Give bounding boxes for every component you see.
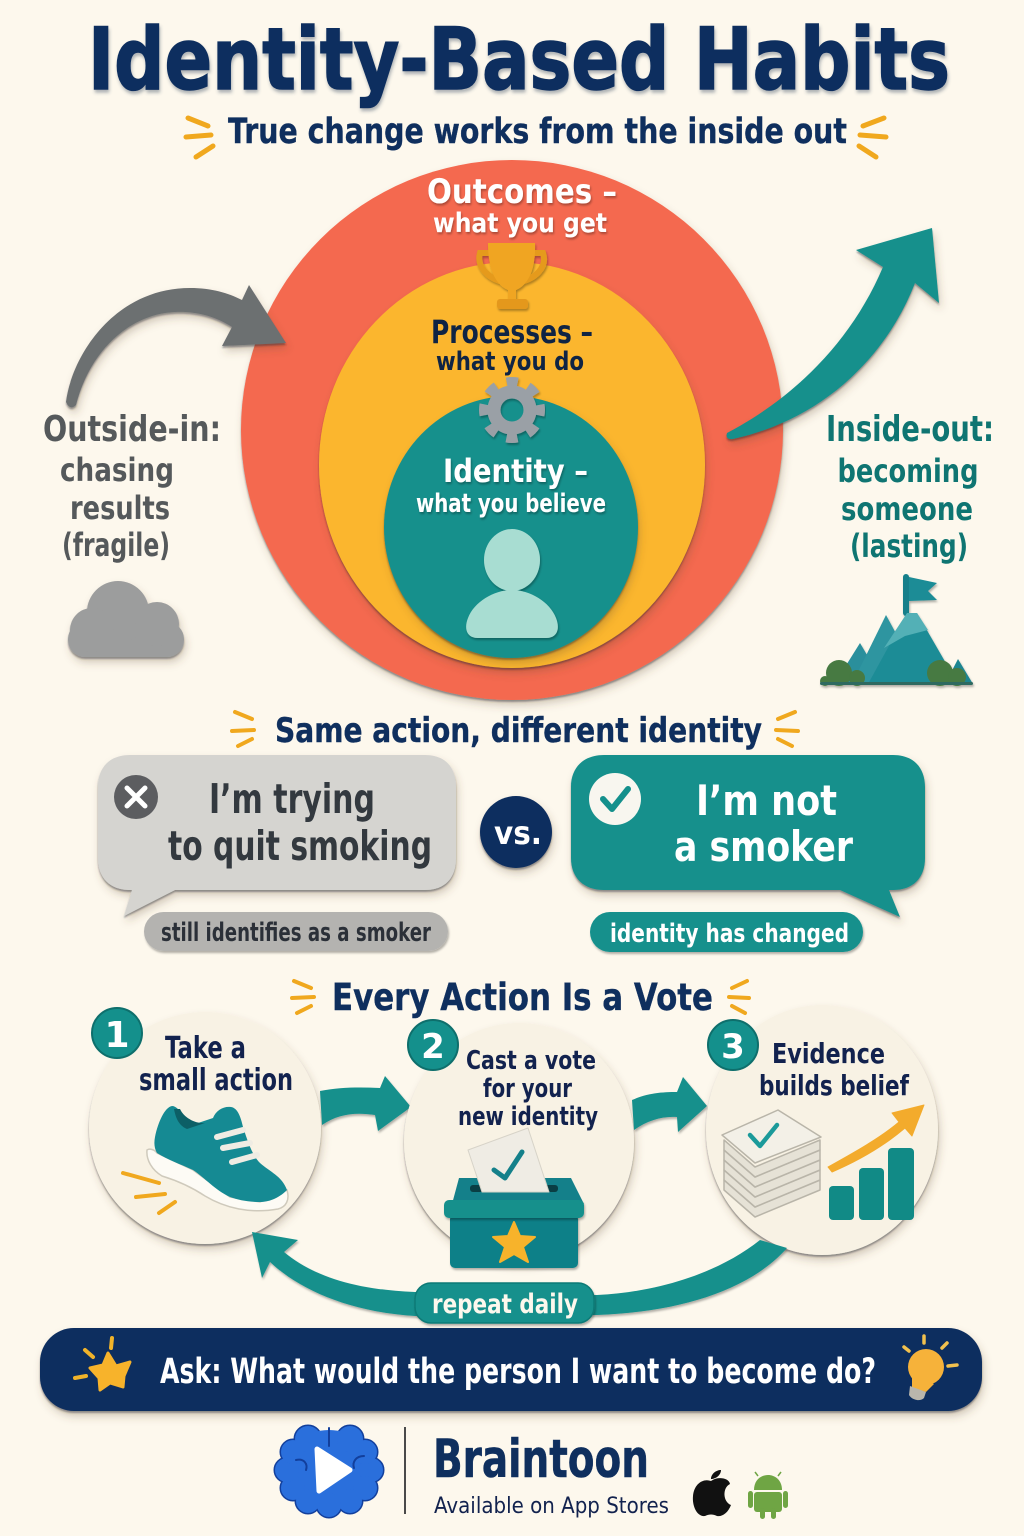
- processes label: [431, 313, 593, 377]
- icon: shoe: [123, 1106, 288, 1213]
- step circle: [404, 1023, 634, 1261]
- outside-in label: Outside-in:: [43, 409, 221, 450]
- speech bubble: not a smoker: [571, 755, 925, 917]
- outside-in label: (fragile): [62, 526, 170, 564]
- speech bubble: trying to quit: [98, 755, 456, 916]
- icon: person: [466, 529, 558, 638]
- arrow: step 2 to 3: [632, 1077, 707, 1132]
- icon: brain with play: [275, 1426, 383, 1517]
- logo divider: [404, 1427, 406, 1514]
- left sparks: [292, 981, 314, 1013]
- outside-in label: [43, 409, 221, 564]
- left sparks: [232, 712, 254, 746]
- bubble shape: [98, 755, 456, 916]
- repeat daily pill: repeat daily: [432, 1289, 578, 1320]
- outside-in label: chasing: [60, 451, 174, 489]
- step text: new identity: [458, 1102, 598, 1132]
- inside-out label: someone: [841, 490, 973, 528]
- step text: for your: [483, 1074, 572, 1104]
- number badge: [408, 1020, 458, 1070]
- loop arrow: repeat daily: [252, 1232, 787, 1316]
- subtitle left sparks: [186, 118, 213, 157]
- icon: check mark: [589, 773, 641, 825]
- heading text: Same action, different identity: [275, 711, 762, 751]
- subtitle text: True change works from the inside out: [228, 112, 847, 152]
- bubble shape: [571, 755, 925, 917]
- inside-out label: becoming: [838, 452, 978, 490]
- step 3: 3: [721, 1027, 745, 1067]
- bubble text: a smoker: [674, 822, 853, 871]
- step text: Evidence: [772, 1037, 885, 1070]
- icon: ballot box: [444, 1128, 584, 1268]
- outcomes label: [427, 172, 617, 239]
- identity label: what you believe: [416, 489, 606, 519]
- bubble text: to quit smoking: [168, 822, 432, 870]
- tagline: Available on App Stores: [434, 1494, 669, 1519]
- inside-out label: (lasting): [850, 527, 968, 565]
- number badge: [92, 1008, 142, 1058]
- identity circle: [384, 396, 638, 658]
- icon: android: [748, 1472, 788, 1519]
- outcomes label: what you get: [433, 208, 607, 239]
- step 2: 2: [421, 1027, 445, 1067]
- outcomes label: Outcomes –: [427, 172, 617, 212]
- processes circle: [319, 262, 705, 668]
- icon: x mark: [114, 775, 158, 819]
- section heading: every action: [292, 976, 749, 1019]
- caption pill: still identifies: still identifies as a smoker: [161, 918, 431, 948]
- step text: builds belief: [759, 1069, 910, 1102]
- question banner: [40, 1328, 982, 1411]
- inside-out label: [826, 409, 994, 565]
- number badge: [708, 1020, 758, 1070]
- bubble text: I’m trying: [209, 775, 375, 823]
- vs badge: [480, 796, 552, 868]
- step 1: [89, 1008, 321, 1244]
- processes label: what you do: [436, 347, 584, 377]
- outside-in arrow: [66, 285, 286, 407]
- processes label: Processes –: [431, 313, 593, 351]
- subtitle: [186, 112, 886, 157]
- vs badge: vs.: [494, 814, 542, 852]
- subtitle right sparks: [859, 118, 886, 157]
- caption pill: identity changed: identity has changed: [610, 919, 849, 949]
- step text: [458, 1046, 598, 1132]
- heading text: Every Action Is a Vote: [332, 976, 713, 1019]
- icon: gear: [484, 382, 540, 438]
- step text: [139, 1031, 293, 1098]
- icon: trophy: [479, 243, 544, 309]
- bubble text: I’m not: [696, 776, 837, 825]
- icon: cloud: [68, 581, 184, 657]
- step text: Cast a vote: [466, 1046, 596, 1076]
- step text: Take a: [165, 1031, 246, 1066]
- caption pill: still identifies: [144, 912, 448, 951]
- outcomes circle: [241, 160, 783, 700]
- icon: star: [75, 1338, 130, 1390]
- repeat daily pill: [415, 1283, 594, 1323]
- caption pill: identity changed: [590, 912, 863, 952]
- right sparks: [776, 712, 798, 746]
- section heading: same action: [232, 711, 798, 751]
- step 2: [404, 1020, 634, 1268]
- identity label: Identity –: [443, 452, 588, 490]
- bubble text: [674, 776, 853, 871]
- right sparks: [729, 981, 749, 1013]
- step text: [759, 1037, 910, 1102]
- icon: mountain with flag: [820, 574, 973, 686]
- step circle: [89, 1012, 321, 1244]
- inside-out arrow: [727, 228, 939, 439]
- brand name: Braintoon: [433, 1429, 649, 1490]
- bubble text: [168, 775, 432, 870]
- icon: light bulb: [904, 1336, 957, 1400]
- step text: small action: [139, 1063, 293, 1098]
- step 1: 1: [104, 1015, 130, 1056]
- concentric circles diagram: [241, 160, 783, 700]
- outside-in label: results: [70, 489, 170, 527]
- icon: paper stack: [722, 1110, 821, 1217]
- logo: Braintoon: [275, 1426, 788, 1519]
- icon: apple: [693, 1470, 731, 1516]
- step circle: [706, 1005, 938, 1255]
- identity label: [416, 452, 606, 519]
- step 3: [706, 1005, 938, 1255]
- icon: bar chart: [828, 1105, 924, 1220]
- arrow: step 1 to 2: [320, 1076, 411, 1131]
